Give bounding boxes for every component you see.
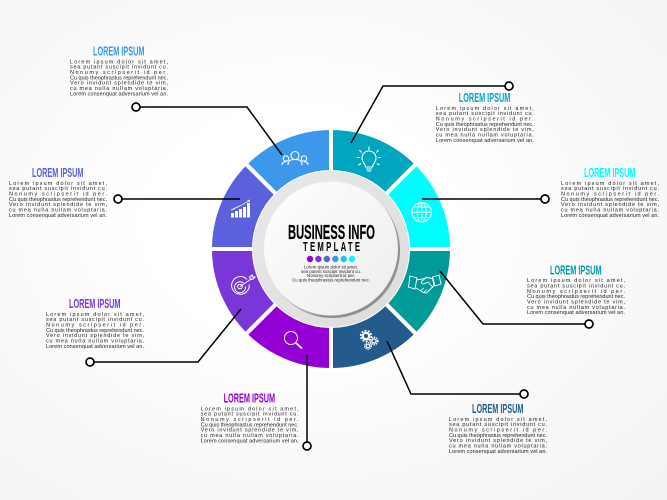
- body text: sea putant suscipit invidunt cu.: [561, 186, 659, 192]
- body text: Nonumy scripserit id per.: [561, 192, 659, 198]
- body text: sea putant suscipit invidunt cu.: [449, 422, 547, 428]
- body text: [9, 181, 107, 219]
- body text: Cu quis theophrastus reprehendunt nec.: [9, 197, 107, 203]
- body text: Nonumy scripserit id per.: [449, 428, 547, 434]
- icon: bar chart: [231, 200, 250, 218]
- segment: blue: [245, 128, 331, 195]
- body text: Vero invidunt splendide te vim,: [46, 333, 144, 339]
- connector: cyan: [422, 195, 549, 203]
- body text: Vero invidunt splendide te vim,: [9, 202, 107, 208]
- body text: Cu quis theophrastus reprehendunt nec.: [527, 294, 625, 300]
- body text: Lorem ipsum dolor sit amet,: [449, 417, 547, 423]
- body text: Lorem consenquat adversarium vel an.: [449, 449, 547, 455]
- text block: teal: [436, 91, 534, 144]
- connector: navy: [387, 341, 528, 398]
- body text: Lorem consenquat adversarium vel an.: [561, 213, 659, 219]
- body text: Cu quis theophrastus reprehendunt nec.: [449, 433, 547, 439]
- body text: cu mea nulla nullam voluptaria.: [9, 208, 107, 214]
- body text: sea putant suscipit invidunt cu.: [527, 283, 625, 289]
- donut chart segments: [210, 128, 452, 370]
- center text: [292, 264, 370, 282]
- body text: Lorem consenquat adversarium vel an.: [46, 344, 144, 350]
- body text: sea putant suscipit invidunt cu.: [46, 317, 144, 323]
- body text: Lorem ipsum dolor sit amet,: [70, 59, 168, 65]
- body text: cu mea nulla nullam voluptaria.: [561, 208, 659, 214]
- body text: Nonumy scripserit id per.: [46, 322, 144, 328]
- icon: light bulb: [357, 146, 381, 171]
- body text: [46, 312, 144, 350]
- connector: violet: [86, 309, 241, 366]
- heading: LOREM IPSUM: [472, 402, 524, 416]
- subtitle: TEMPLATE: [303, 241, 360, 255]
- color dots: [307, 256, 355, 262]
- body text: Lorem consenquat adversarium vel an.: [527, 310, 625, 316]
- center text: Nonumy scripserit id per.: [307, 273, 355, 278]
- body text: sea putant suscipit invidunt cu.: [436, 111, 534, 117]
- segment: violet: [210, 249, 277, 335]
- text block: magenta: [201, 392, 299, 444]
- body text: sea putant suscipit invidunt cu.: [70, 65, 168, 71]
- body text: Lorem ipsum dolor sit amet,: [46, 312, 144, 318]
- body text: cu mea nulla nullam voluptaria.: [46, 339, 144, 345]
- segment: indigo: [210, 163, 277, 249]
- body text: Vero invidunt splendide te vim,: [561, 202, 659, 208]
- heading: LOREM IPSUM: [459, 91, 510, 105]
- icon: people: [282, 152, 308, 165]
- heading: LOREM IPSUM: [550, 263, 602, 277]
- body text: Lorem ipsum dolor sit amet,: [436, 106, 534, 112]
- body text: [449, 417, 547, 455]
- body text: Nonumy scripserit id per.: [527, 289, 625, 295]
- connector: indigo: [114, 195, 240, 203]
- text block: blue: [70, 44, 168, 97]
- connector: teal: [351, 82, 513, 143]
- body text: [70, 59, 168, 97]
- segment: green teal: [385, 249, 452, 335]
- heading: LOREM IPSUM: [32, 166, 84, 180]
- body text: Cu quis theophrastus reprehendunt nec.: [46, 328, 144, 334]
- center disc: [264, 182, 398, 316]
- body text: sea putant suscipit invidunt cu.: [201, 412, 299, 418]
- body text: cu mea nulla nullam voluptaria.: [70, 86, 168, 92]
- text block: violet: [46, 297, 144, 350]
- body text: Lorem consenquat adversarium vel an.: [201, 438, 299, 444]
- center disc shadow: [265, 183, 400, 318]
- icon: handshake: [408, 275, 441, 293]
- body text: [201, 406, 299, 444]
- text block: green teal: [527, 263, 625, 316]
- body text: Nonumy scripserit id per.: [201, 417, 299, 423]
- body text: cu mea nulla nullam voluptaria.: [527, 305, 625, 311]
- body text: Vero invidunt splendide te vim,: [449, 438, 547, 444]
- title: BUSINESS INFO: [288, 222, 375, 244]
- body text: [561, 181, 659, 219]
- body text: Nonumy scripserit id per.: [436, 116, 534, 122]
- body text: [527, 278, 625, 316]
- body text: cu mea nulla nullam voluptaria.: [201, 433, 299, 439]
- body text: cu mea nulla nullam voluptaria.: [449, 444, 547, 450]
- body text: Vero invidunt splendide te vim,: [201, 428, 299, 434]
- body text: Cu quis theophrastus reprehendunt nec.: [70, 75, 168, 81]
- icon: gears: [361, 331, 378, 349]
- center text: Lorem ipsum dolor sit amet,: [304, 264, 358, 270]
- center text: Cu quis theophrastus reprehendunt nec.: [292, 277, 370, 282]
- text block: cyan: [561, 166, 659, 219]
- text block: indigo: [9, 166, 107, 219]
- body text: Nonumy scripserit id per.: [70, 70, 168, 76]
- segment: cyan: [385, 163, 452, 249]
- body text: Lorem ipsum dolor sit amet,: [201, 406, 299, 412]
- icon: globe: [412, 203, 431, 222]
- body text: Vero invidunt splendide te vim,: [70, 81, 168, 87]
- heading: LOREM IPSUM: [93, 44, 144, 58]
- body text: Lorem ipsum dolor sit amet,: [527, 278, 625, 284]
- heading: LOREM IPSUM: [69, 297, 120, 311]
- icon: target: [232, 275, 255, 294]
- connector: green teal: [440, 271, 593, 328]
- center text: sea putent suscipit invidunt cu.: [301, 269, 361, 274]
- body text: [436, 106, 534, 144]
- segment: magenta purple: [245, 303, 331, 370]
- connector: blue: [132, 103, 282, 155]
- segment: teal top right: [331, 128, 417, 195]
- body text: Lorem consenquat adversarium vel an.: [70, 91, 168, 97]
- body text: Cu quis theophrastus reprehendunt nec.: [561, 197, 659, 203]
- body text: Lorem consenquat adversarium vel an.: [436, 138, 534, 144]
- body text: Cu quis theophrastus reprehendunt nec.: [201, 422, 299, 428]
- body text: Cu quis theophrastus reprehendunt nec.: [436, 122, 534, 128]
- text block: navy: [449, 402, 547, 455]
- body text: Vero invidunt splendide te vim,: [527, 299, 625, 305]
- body text: Lorem ipsum dolor sit amet,: [561, 181, 659, 187]
- segment: navy: [331, 303, 417, 370]
- body text: Lorem ipsum dolor sit amet,: [9, 181, 107, 187]
- body text: Vero invidunt splendide te vim,: [436, 127, 534, 133]
- heading: LOREM IPSUM: [224, 392, 275, 406]
- body text: Lorem consenquat adversarium vel an.: [9, 213, 107, 219]
- connector: magenta: [303, 355, 311, 450]
- body text: Nonumy scripserit id per.: [9, 192, 107, 198]
- center ring: [253, 171, 409, 327]
- icon: magnifier: [284, 332, 302, 348]
- body text: sea putant suscipit invidunt cu.: [9, 186, 107, 192]
- body text: cu mea nulla nullam voluptaria.: [436, 133, 534, 139]
